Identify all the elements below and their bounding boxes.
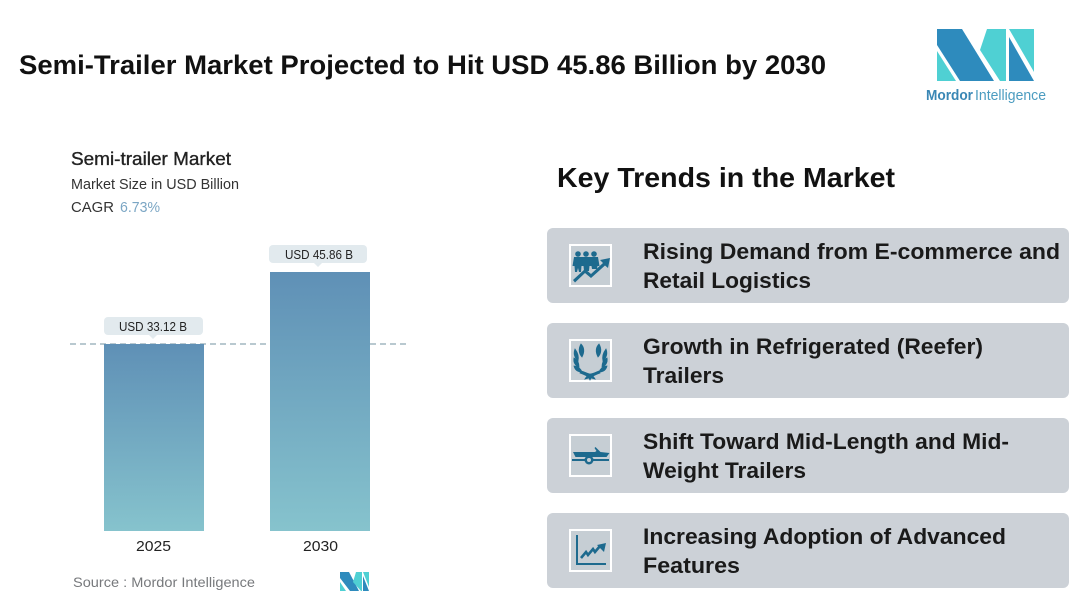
trend text: Weight Trailers: [643, 458, 806, 483]
heading: key trends: Key Trends in the Market: [557, 162, 895, 193]
value label: 2030: USD 45.86 B: [285, 248, 353, 262]
icon: laurel wreath: [570, 340, 611, 381]
logo: Mordor Intelligence: Intelligence: [975, 87, 1046, 104]
bar chart: [70, 245, 406, 555]
panel: trend 1: [547, 228, 1069, 303]
icon: people growth: [570, 245, 611, 286]
chart heading: CAGR: [71, 200, 114, 216]
icon: line chart: [570, 530, 611, 571]
chart heading: Semi-trailer Market: [71, 148, 231, 169]
axis label: 2030: 2030: [303, 538, 338, 555]
chart heading: Market Size in USD Billion: [71, 177, 239, 193]
panel: trend 3: [547, 418, 1069, 493]
axis label: 2025: 2025: [136, 538, 171, 555]
logo: Mordor Intelligence: [926, 29, 1046, 104]
chart heading: 6.73%: [120, 200, 160, 216]
trend text: Retail Logistics: [643, 268, 811, 293]
logo: Mordor Intelligence: Mordor: [926, 87, 973, 104]
trend text: Growth in Refrigerated (Reefer): [643, 334, 983, 359]
small logo: [340, 572, 369, 591]
title: Semi-Trailer Market Projected to Hit USD 45.86 Billion by 2030: [19, 50, 826, 80]
bar: 2030: [270, 272, 370, 531]
trend text: Rising Demand from E-commerce and: [643, 239, 1060, 264]
value label: 2030: [269, 245, 367, 267]
chart heading: [71, 148, 239, 216]
value label: 2025: [104, 317, 203, 339]
trend text: Trailers: [643, 363, 724, 388]
icon: boat trailer: [570, 435, 611, 476]
panel: trend 2: [547, 323, 1069, 398]
trend text: Shift Toward Mid-Length and Mid-: [643, 429, 1009, 454]
bar: 2025: [104, 344, 204, 531]
trend text: Increasing Adoption of Advanced: [643, 524, 1006, 549]
source note: Source : Mordor Intelligence: [73, 574, 255, 590]
value label: 2025: USD 33.12 B: [119, 320, 187, 334]
trend text: Features: [643, 553, 740, 578]
panel: trend 4: [547, 513, 1069, 588]
